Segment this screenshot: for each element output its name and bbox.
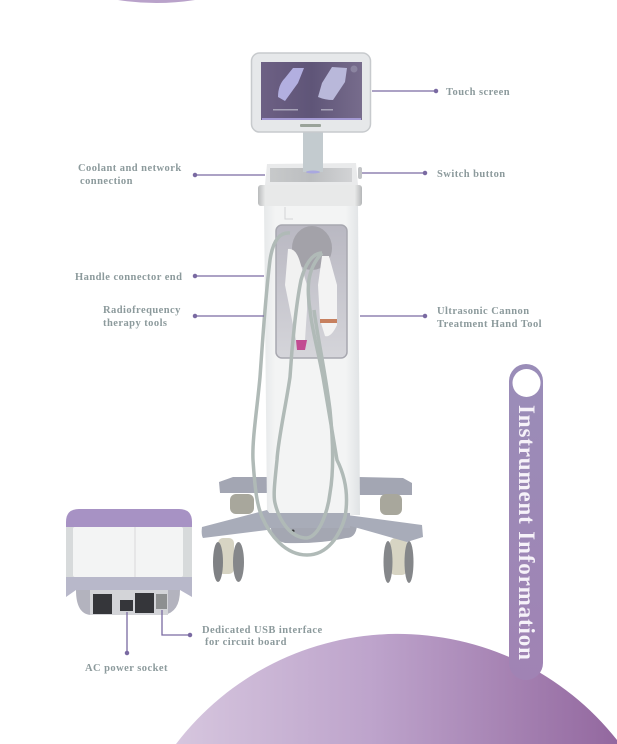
line: USB [162,610,192,637]
line: ultrasonic [360,314,427,318]
fan left [93,594,112,614]
label: touch screen: Touch screen [446,87,510,98]
inset lavender header [66,509,192,527]
label: AC power socket: AC power socket [85,663,168,674]
RF handpiece [285,249,307,350]
screen handpiece images [262,66,361,120]
monitor screen [261,62,362,120]
line: handle connector [193,274,264,278]
side pill: instrument information: Instrument Information [514,405,539,661]
inset cabinet [73,527,183,577]
top head [265,163,358,185]
front base arms [202,510,423,542]
line: switch button [362,171,427,175]
monitor frame [252,53,370,132]
line: AC socket [125,612,129,655]
line: coolant [193,173,265,177]
inset cabinet sides [66,527,192,577]
rear base arms [219,477,412,515]
side switch [358,167,362,179]
instrument: treatment machine [202,53,423,583]
top purple arc [118,0,195,3]
usb port [156,594,167,609]
monitor neck [303,131,323,172]
label: radiofrequency therapy tools: Radiofrequency [103,305,181,316]
inset: power panel [66,509,192,615]
handpiece alcove [276,225,347,358]
side pill: instrument information [509,364,543,680]
label: coolant and network connection: Coolant and network [78,163,182,174]
ultrasonic handpiece [318,256,337,336]
inset lobes [76,590,180,615]
fan right [135,593,154,613]
lower body [270,520,357,543]
bottom purple circle [176,634,617,744]
power socket [120,600,133,611]
cables [253,233,346,555]
small front mark [285,207,293,219]
front casters [213,538,414,583]
label: ultrasonic cannon treatment hand tool: Ultrasonic Cannon [437,306,530,317]
label: USB interface: for circuit board [205,637,287,648]
line: touch screen [372,89,438,93]
silver band [258,185,362,206]
line: RF tools [193,314,264,318]
label: handle connector end: Handle connector end [75,272,182,283]
label: coolant and network connection: connection [80,176,133,187]
label: switch button: Switch button [437,169,506,180]
column [264,204,360,515]
monitor logo [300,124,321,127]
label: ultrasonic cannon treatment hand tool: Treatment Hand Tool [437,319,542,330]
label: USB interface: Dedicated USB interface [202,625,323,636]
inset base [66,577,192,597]
label: radiofrequency therapy tools: therapy tools [103,318,167,329]
connector lines [125,89,438,655]
